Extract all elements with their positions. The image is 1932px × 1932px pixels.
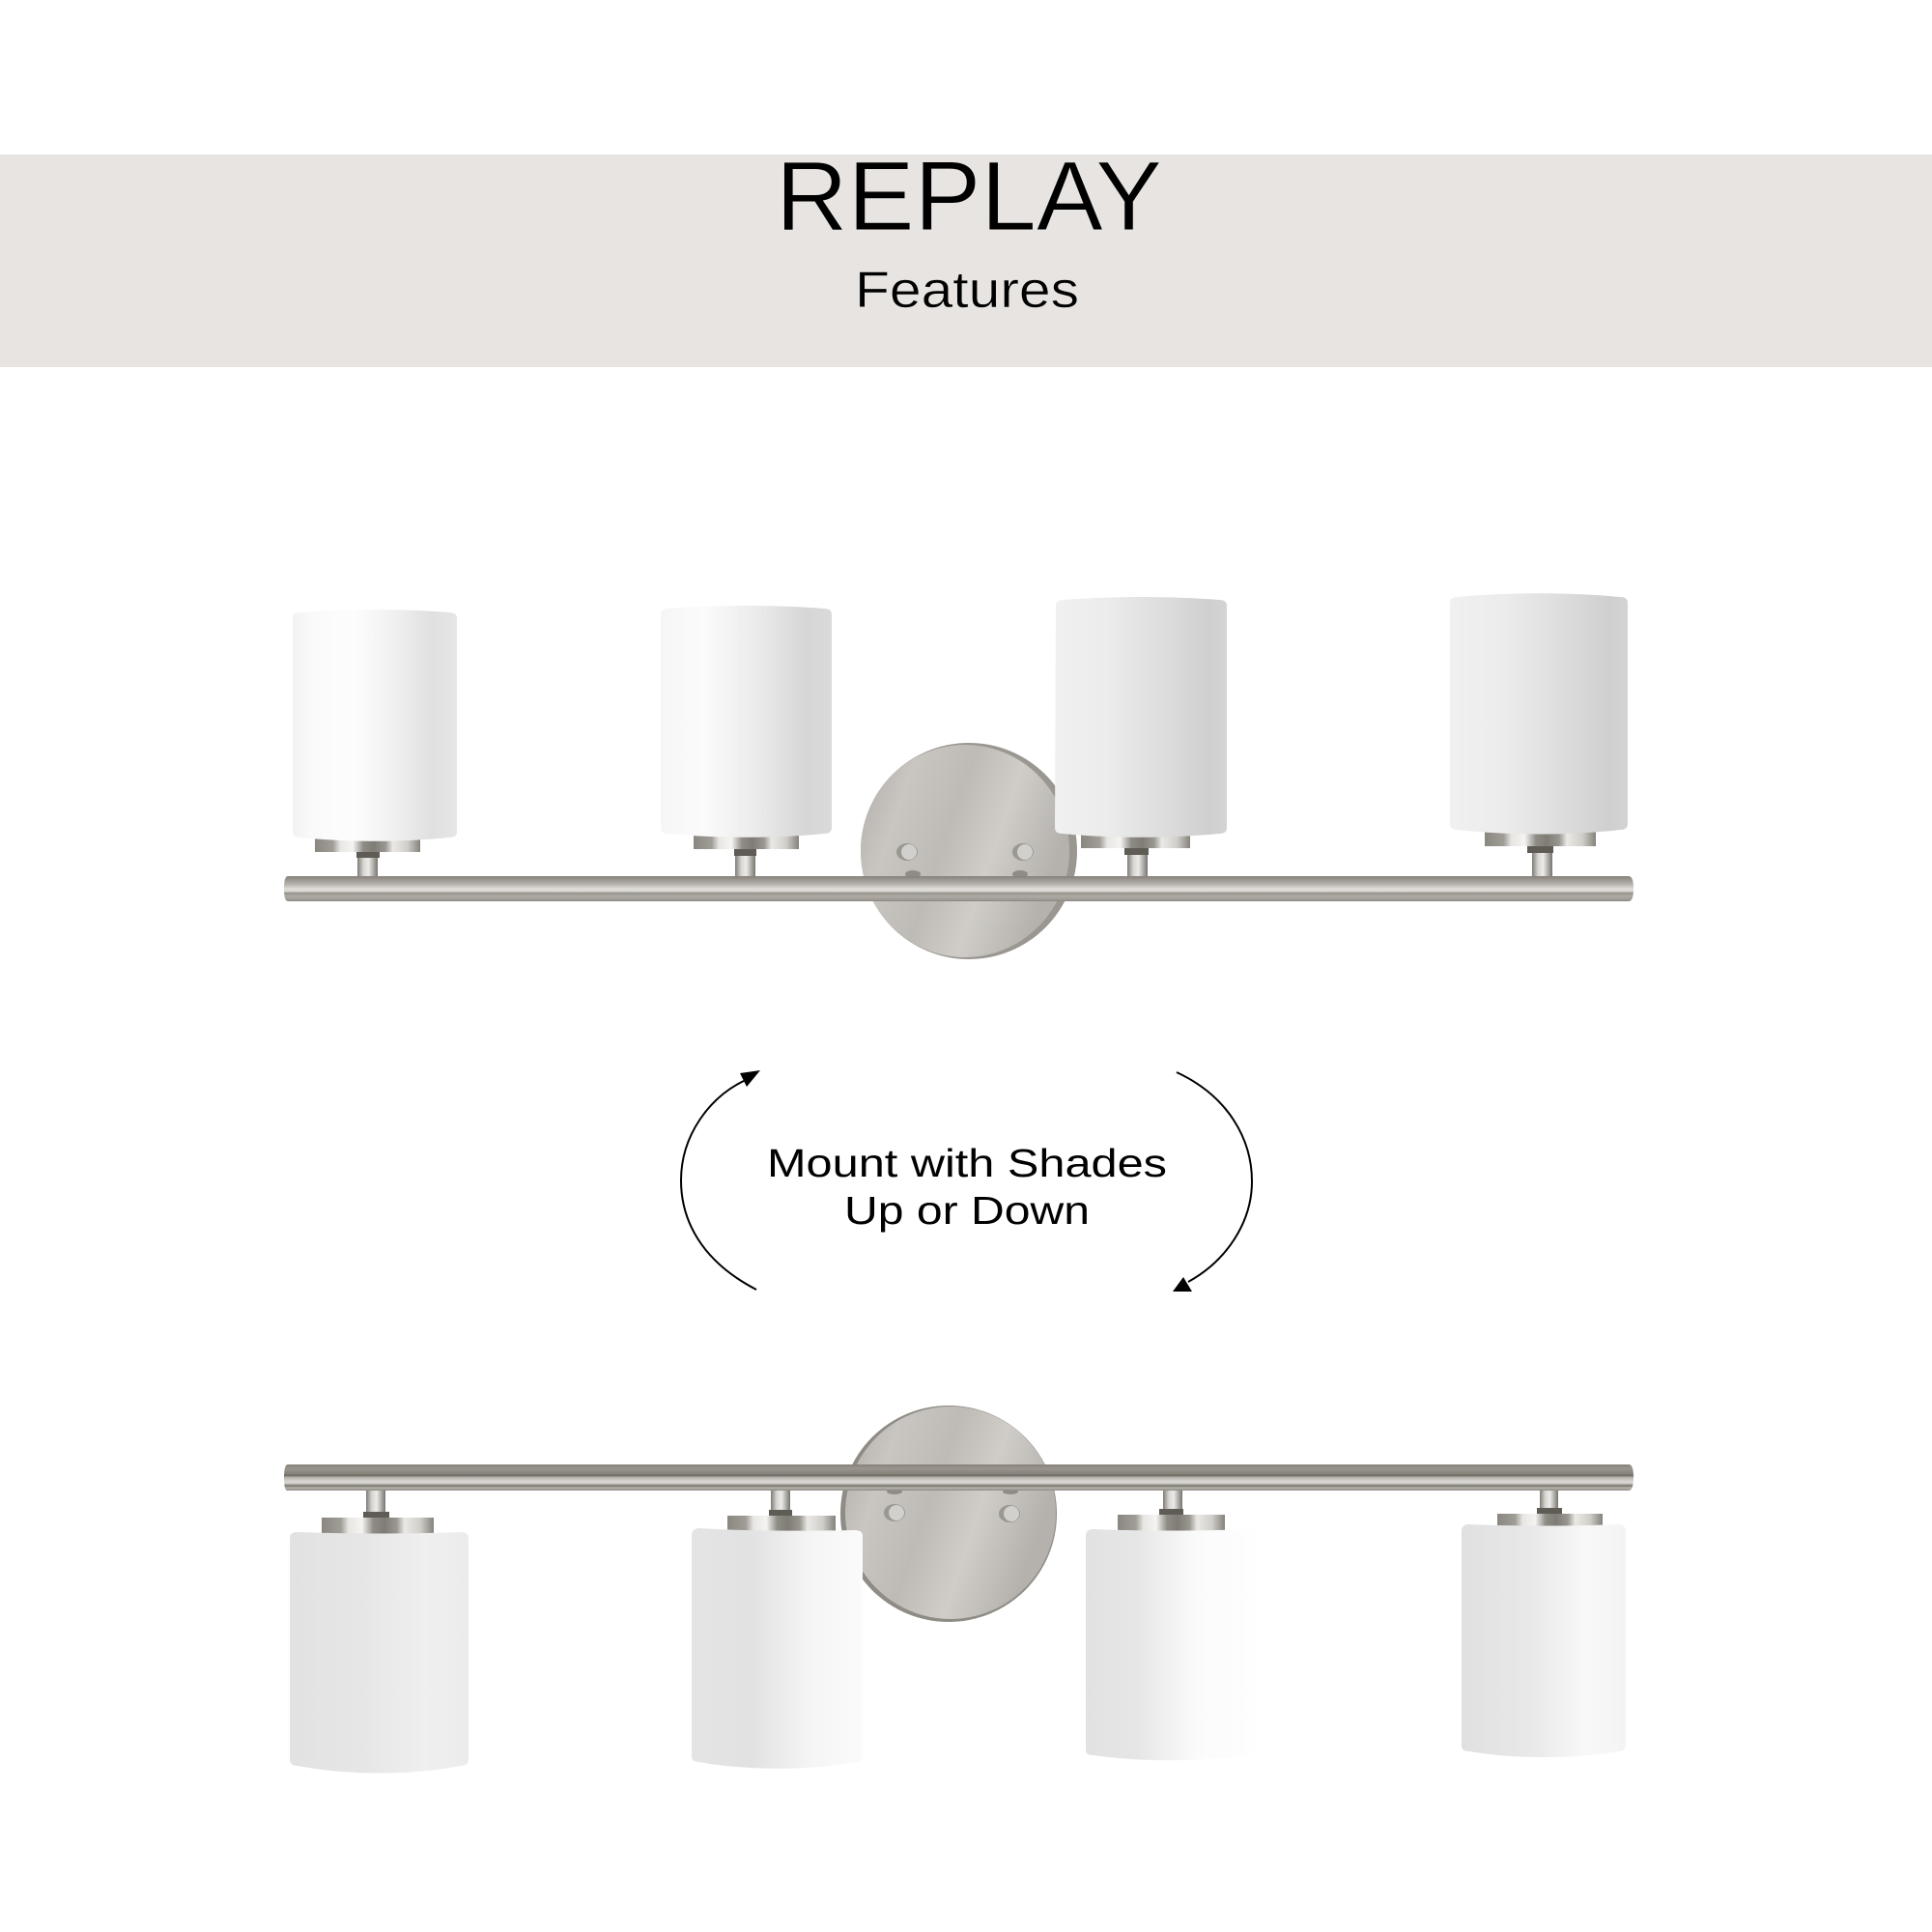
shade 1 xyxy=(293,610,457,841)
rotate arrow: right xyxy=(1173,1072,1252,1292)
subtitle: Features xyxy=(855,262,1079,319)
title: REPLAY xyxy=(776,141,1162,251)
stems and cups xyxy=(322,1487,1603,1536)
product photo: fixture with shades down xyxy=(284,1406,1634,1774)
shade 4 xyxy=(1450,593,1628,835)
rotate arrow: left xyxy=(681,1070,760,1290)
shade 3 xyxy=(1055,597,1227,838)
bar arm xyxy=(284,1464,1634,1491)
product photo: fixture with shades up xyxy=(284,593,1634,959)
shade 2 xyxy=(661,606,832,838)
header band xyxy=(0,155,1932,367)
stems and cups xyxy=(315,829,1596,880)
caption xyxy=(767,1141,1167,1233)
mounting plate xyxy=(840,1406,1057,1622)
caption: Mount with Shades xyxy=(767,1141,1167,1185)
bar arm xyxy=(284,876,1634,901)
shade 3 xyxy=(1086,1529,1257,1760)
shade 4 xyxy=(1462,1524,1626,1757)
shade 1 xyxy=(290,1532,469,1774)
caption: Up or Down xyxy=(844,1188,1090,1233)
mounting plate xyxy=(861,743,1077,959)
shade 2 xyxy=(692,1528,863,1769)
